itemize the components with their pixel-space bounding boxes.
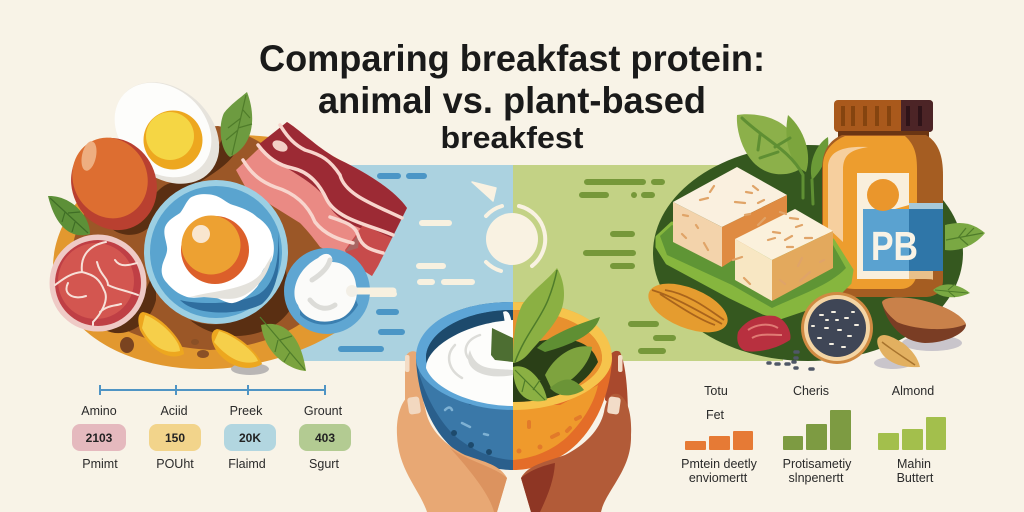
bar chart: almond: Buttert [897,471,934,485]
icon: sun [472,182,545,271]
bar charts: plant foods [681,384,946,485]
axis line [100,385,325,395]
panel: plant side backdrop [513,165,783,361]
icon: left hand fingertip [405,351,425,420]
icon: yogurt dish [284,248,393,334]
stat: ground: 403 [315,431,335,445]
icon: almond [642,274,734,342]
illustration: split bowl [416,268,612,470]
icon: boiled egg [94,61,240,205]
icon: chia seed bowl [768,292,873,369]
icon: tofu blocks [673,167,833,301]
dark green plate [653,145,963,361]
rim: orange [513,302,612,410]
illustration: left hand [397,394,507,512]
bowl interior: dark blue [426,310,513,402]
icon: brazil nut [882,297,966,351]
panel: animal side backdrop [300,165,513,361]
icon: brown egg [56,124,172,244]
title: animal vs. plant-based [318,80,706,121]
title [259,38,765,155]
bowl: orange body light [513,385,598,460]
stat: ground [299,404,351,471]
stat: amino: Pmimt [82,457,118,471]
icon: raw meat [50,234,146,332]
bowl interior: orange [513,310,602,402]
title: breakfest [440,120,584,155]
scale: amino acid stats [72,385,351,471]
bar chart: cheris: Cheris [793,384,829,398]
stat: ground: Sgurt [309,457,339,471]
bar chart: tofu: Totu [704,384,728,398]
icon: small nut [874,335,920,369]
platter base [53,126,372,369]
bar chart: cheris: slnpenertt [789,471,844,485]
bar chart: almond [878,384,946,485]
illustration: right hand [521,394,631,512]
bowl: orange half [513,302,612,470]
stat: amino [72,404,126,471]
bowl speckles [445,408,580,455]
icon: pineapple wedges [138,312,269,375]
stat: amino: Amino [81,404,117,418]
title: Comparing breakfast protein: [259,38,765,79]
bar chart: cheris: Protisametiy [783,457,852,471]
stat: amino: 2103 [86,431,113,445]
stat: peak: 20K [239,431,261,445]
icon: right side leaves [933,223,985,297]
icon: right hand fingertip [605,351,628,420]
bowl: blue body light [418,370,513,460]
stat: peak: Flaimd [228,457,266,471]
icon: peanut butter jar [822,100,943,297]
stat: acid: Aciid [160,404,188,418]
illustration: animal protein platter [48,61,407,375]
bar chart: tofu: Pmtein deetly [681,457,758,471]
bar chart: tofu: enviomertt [689,471,748,485]
stat: acid: 150 [165,431,185,445]
icon: tofu tray [657,223,852,318]
illustration: plant protein platter [642,100,985,369]
stat: acid: POUht [156,457,194,471]
bar chart: tofu [681,384,758,485]
bar chart: tofu: Fet [706,408,725,422]
icon: spinach leaves [737,114,828,204]
icon: fried egg plate [144,180,288,324]
icon: bacon [236,122,407,276]
stat: peak [224,404,276,471]
yogurt [426,311,513,406]
bowl: blue half [416,302,513,470]
bar chart: almond: Mahin [897,457,931,471]
stat: acid [149,404,201,471]
icon: dried fruit [737,316,790,352]
bowl interior: dark green [513,339,598,402]
spinach [513,268,600,401]
bar chart: cheris [783,384,852,485]
stat: peak: Preek [230,404,263,418]
icon: peanut butter jar: PB [871,223,918,269]
rim: blue [416,302,513,410]
bar chart: almond: Almond [892,384,934,398]
stat: ground: Grount [304,404,343,418]
icon: leaves [48,92,306,371]
